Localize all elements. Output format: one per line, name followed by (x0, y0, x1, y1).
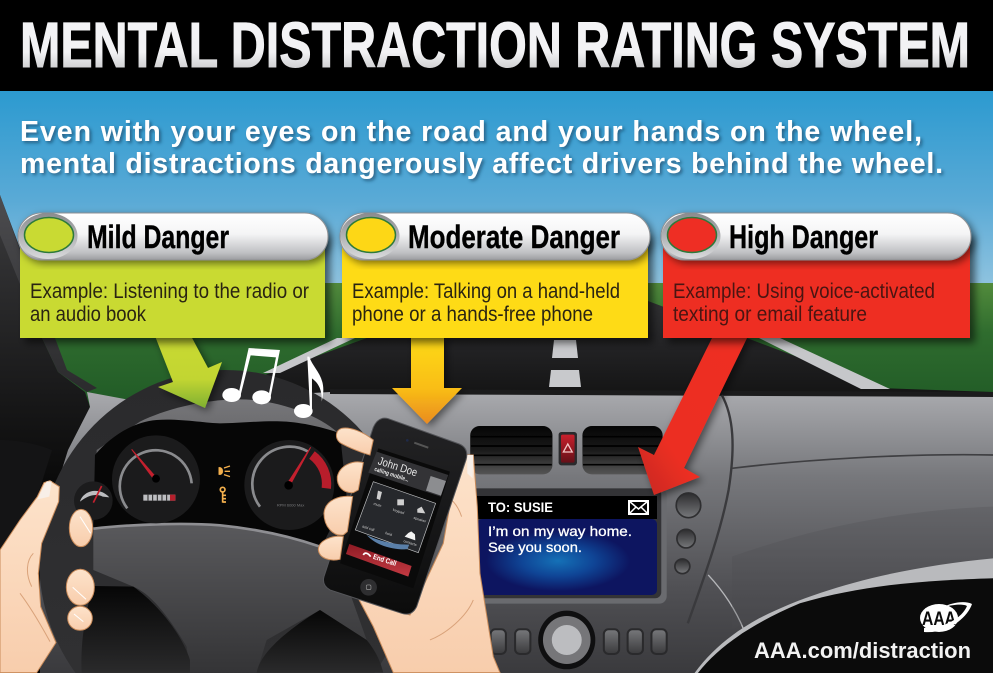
button icons (362, 491, 427, 547)
right hand fingers (318, 428, 373, 560)
button icons: add call (362, 524, 375, 532)
finger nails (73, 517, 91, 622)
end call button (346, 544, 412, 577)
screen bezel (470, 488, 667, 604)
yellow arrow (392, 336, 462, 424)
indicator light (18, 213, 78, 259)
right gauge: RPM 6000 Max (277, 502, 304, 507)
hub (93, 525, 367, 673)
example (673, 280, 935, 326)
left gauge (112, 435, 200, 523)
pill header (661, 213, 971, 260)
heading: Mild Danger (87, 219, 229, 255)
green arrow (155, 336, 222, 408)
radio buttons (491, 629, 667, 654)
headlight warning icon (219, 466, 230, 477)
dashboard details (688, 395, 993, 630)
callout: moderate danger (340, 213, 650, 338)
contact banner (368, 452, 448, 497)
phone body (323, 418, 467, 614)
home button (360, 579, 377, 596)
example: an audio book (30, 303, 146, 326)
temperature warning icon (220, 487, 226, 503)
example: Example: Talking on a hand-held (352, 280, 620, 303)
title band (0, 0, 993, 91)
palm (358, 455, 500, 673)
screen (340, 448, 450, 588)
double note (222, 348, 280, 404)
indicator light (662, 213, 720, 259)
cluster lower highlight (93, 524, 320, 547)
right opening (257, 610, 383, 673)
grass hills (0, 283, 993, 408)
smartphone (323, 418, 467, 614)
side knobs (675, 493, 701, 574)
AAA logo: AAA (922, 609, 956, 630)
road edge lines (263, 338, 890, 389)
website: AAA.com/distraction (754, 638, 971, 663)
palm creases (20, 553, 50, 642)
example (30, 280, 309, 326)
instrument cluster (93, 420, 347, 547)
right air vent (582, 426, 663, 474)
caller name: John Doe (376, 455, 419, 479)
indicator light (340, 213, 400, 259)
contact photo (426, 476, 446, 496)
button icons: speaker (413, 516, 427, 524)
recipient: TO: SUSIE (488, 500, 553, 515)
central dial (538, 611, 595, 669)
calling status: calling mobile... (373, 467, 410, 484)
callout: mild danger (18, 213, 328, 338)
fingers (66, 509, 94, 630)
call buttons panel (355, 482, 436, 553)
dashboard (40, 389, 993, 673)
message: I’m on my way home. (488, 523, 632, 539)
music notes (222, 348, 323, 418)
panel (342, 232, 648, 338)
subtitle: mental distractions dangerously affect drivers behind the wheel. (20, 148, 943, 180)
thumbnail (467, 455, 473, 478)
steering wheel (39, 370, 411, 673)
button icons: contacts (403, 539, 417, 547)
single note (294, 357, 323, 418)
red arrow (638, 336, 748, 495)
navigation screen (477, 496, 657, 595)
palm creases (430, 497, 473, 640)
heading: Moderate Danger (408, 219, 620, 255)
thumbnail (37, 481, 52, 499)
message (488, 523, 632, 555)
bottom right swoosh (695, 558, 993, 673)
left air vent (470, 426, 552, 474)
heading: High Danger (729, 219, 878, 255)
subtitle (20, 116, 943, 180)
pill header (18, 213, 328, 260)
left opening (81, 586, 190, 673)
centre console (470, 426, 701, 669)
end call button: End Call (372, 552, 398, 568)
hazard button (559, 432, 577, 465)
sky (0, 91, 993, 291)
example: Example: Using voice-activated (673, 280, 935, 303)
callout: high danger (661, 213, 971, 338)
upper spoke (95, 399, 347, 548)
example (352, 280, 620, 326)
envelope icon (629, 501, 648, 514)
wheel rim (39, 370, 411, 673)
road (200, 268, 993, 396)
speaker and camera (406, 439, 428, 448)
message: See you soon. (488, 539, 582, 555)
road centre dashes (549, 340, 581, 387)
right hand (358, 455, 500, 673)
example: texting or email feature (673, 303, 867, 326)
button icons: hold (385, 531, 392, 537)
door and A-pillar (0, 195, 97, 673)
globe wallpaper (367, 535, 409, 549)
AAA logo (920, 602, 972, 632)
button icons: keypad (392, 508, 405, 515)
right gauge (244, 440, 334, 530)
button icons: mute (373, 502, 382, 508)
left hand (0, 481, 94, 673)
screen body (477, 519, 657, 595)
small gauge (74, 481, 113, 520)
pill header (340, 213, 650, 260)
screen header (477, 496, 657, 519)
example: phone or a hands-free phone (352, 303, 593, 326)
palm (0, 481, 59, 673)
panel (663, 232, 970, 338)
panel (20, 232, 325, 338)
example: Example: Listening to the radio or (30, 280, 309, 303)
subtitle: Even with your eyes on the road and your hands on the wheel, (20, 116, 922, 148)
